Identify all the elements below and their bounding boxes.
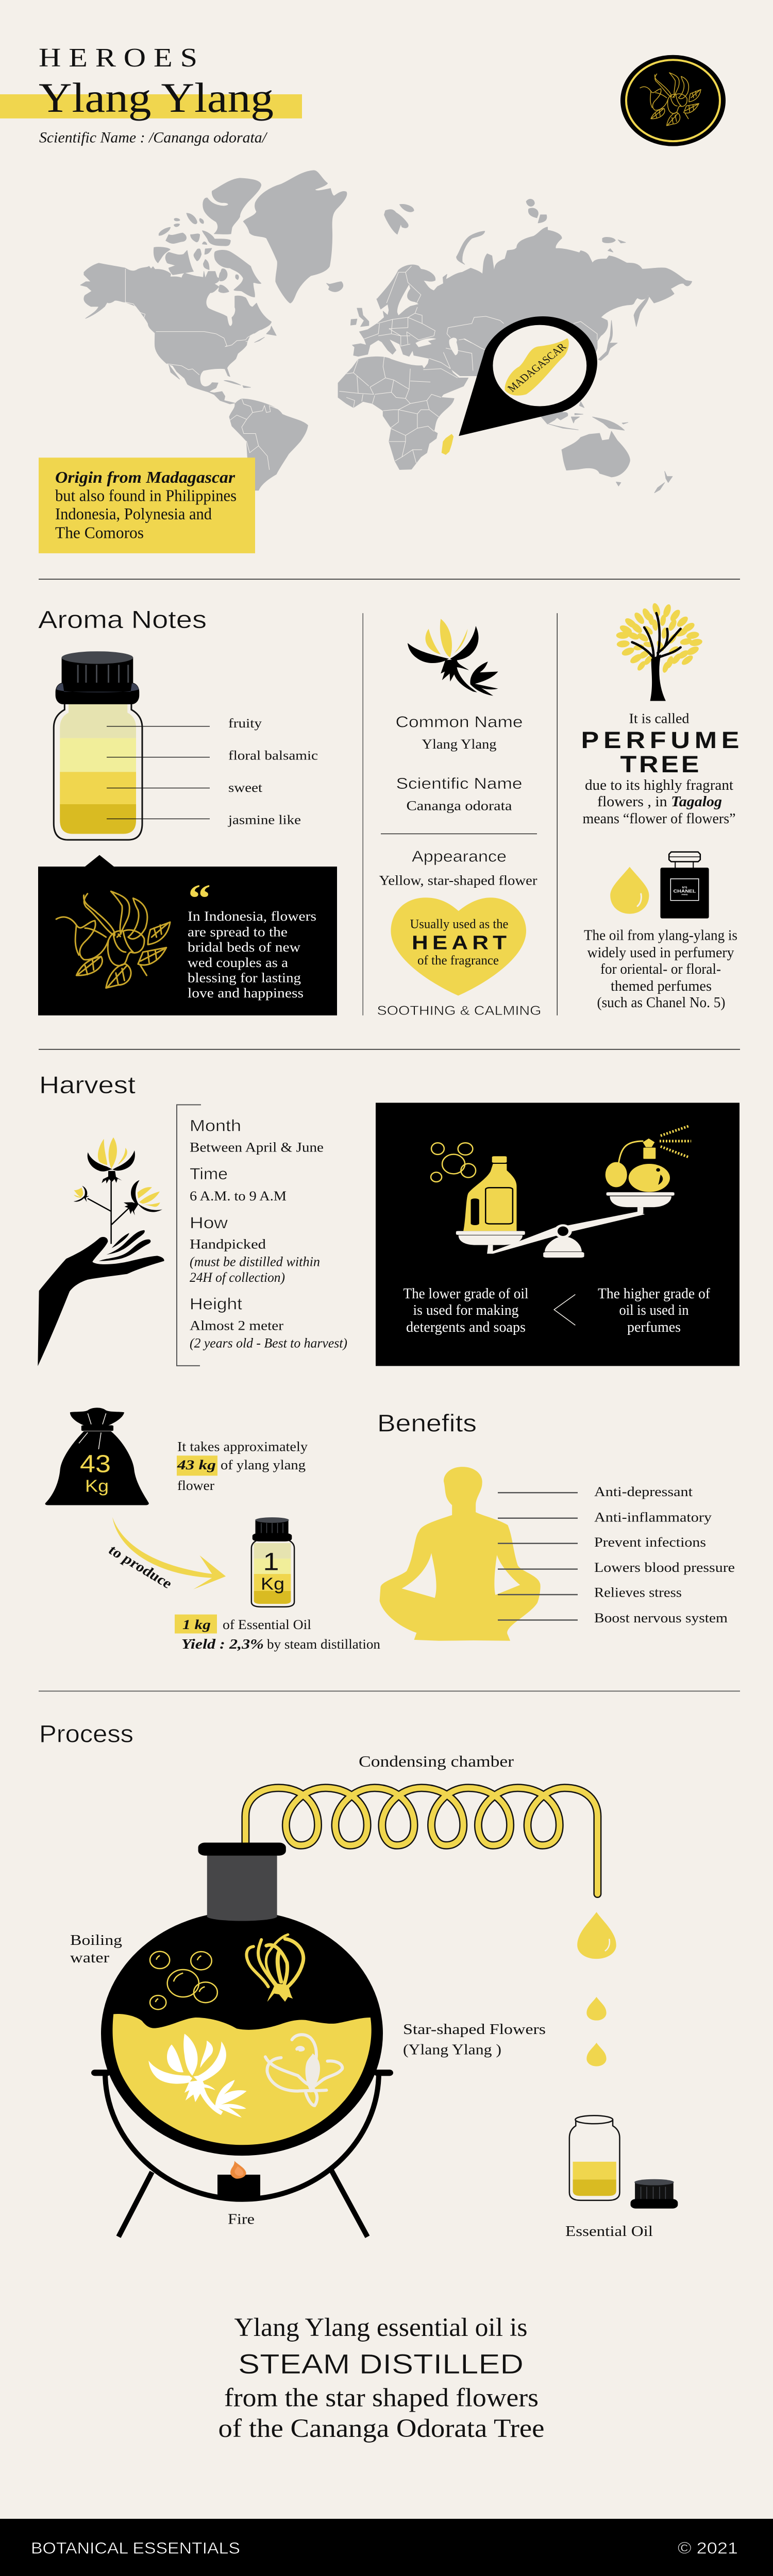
- subtitle: scientific name: Scientific Name : /Cananga odorata/: [39, 129, 268, 146]
- text: 43 kg of flower: 43 kg: [177, 1458, 216, 1473]
- panel: oil grades: is used for making: [413, 1301, 519, 1318]
- callout: origin: The Comoros: [55, 524, 144, 542]
- heading: Aroma Notes: Aroma Notes: [38, 606, 207, 634]
- panel: Indonesia quote: wed couples as a: [188, 956, 289, 971]
- panel: Indonesia quote: love and happiness: [188, 986, 304, 1001]
- text: 43 kg of flower: [177, 1439, 308, 1494]
- harvest facts: [177, 1105, 347, 1366]
- aroma note labels: floral balsamic: [228, 748, 318, 762]
- aroma note labels: fruity: [228, 716, 262, 731]
- benefit labels: [498, 1485, 735, 1625]
- harvest facts: How: [190, 1214, 228, 1232]
- icon: oil drop: [610, 867, 649, 914]
- arrow: to produce: to produce: [105, 1543, 176, 1591]
- label: fire: Fire: [228, 2210, 255, 2227]
- panel: Indonesia quote: [38, 855, 337, 1015]
- icon: perfume bottle: CHANEL: [673, 889, 696, 893]
- footer: © 2021: [678, 2540, 738, 2557]
- map pin: [459, 316, 597, 436]
- names block: Cananga odorata: [407, 799, 512, 814]
- label: condensing chamber: Condensing chamber: [359, 1753, 514, 1770]
- names block: Common Name: [396, 713, 523, 731]
- names block: Yellow, star-shaped flower: [379, 873, 537, 888]
- perfumery text: The oil from ylang-ylang is: [584, 926, 737, 943]
- panel: Indonesia quote: In Indonesia, flowers: [188, 909, 316, 924]
- footer: BOTANICAL ESSENTIALS: [31, 2540, 240, 2557]
- heading: Process: Process: [39, 1720, 133, 1748]
- perfume tree text: flowers , in Tagalog: [597, 793, 722, 809]
- eyebrow: HEROES: HEROES: [39, 43, 197, 73]
- label: boiling water: water: [70, 1949, 110, 1965]
- aroma note labels: jasmine like: [228, 812, 301, 827]
- world map: [80, 171, 692, 493]
- benefit labels: Anti-inflammatory: [594, 1510, 712, 1525]
- inland seas: [397, 284, 458, 355]
- text: 43 kg of flower: It takes approximately: [177, 1439, 308, 1454]
- icon: distillation stand: [91, 2070, 393, 2237]
- icon: round flower badge: [620, 55, 726, 146]
- closing statement: Ylang Ylang essential oil is: [234, 2313, 528, 2342]
- white flower: [148, 2033, 247, 2117]
- pin label: Madagascar: MADAGASCAR: [505, 341, 569, 394]
- label: star-shaped flowers: [403, 2021, 546, 2058]
- perfume tree text: TREE: [620, 752, 699, 777]
- perfumery text: widely used in perfumery: [587, 944, 734, 961]
- aroma note labels: sweet: [228, 781, 262, 795]
- icon: 1 kg bottle: 1: [263, 1548, 279, 1575]
- heading: Benefits: Benefits: [377, 1410, 477, 1437]
- icon: 1 kg bottle: Kg: [261, 1574, 284, 1594]
- names block: Scientific Name: [396, 774, 523, 792]
- closing statement: [219, 2313, 544, 2443]
- names block: Appearance: [412, 848, 507, 865]
- title highlight bar: [0, 94, 302, 118]
- harvest facts: Handpicked: [190, 1236, 266, 1252]
- perfumery text: for oriental- or floral-: [600, 960, 721, 977]
- callout: origin: Origin from Madagascar: [55, 469, 236, 486]
- names block: Ylang Ylang: [422, 737, 497, 752]
- flask neck: [198, 1842, 286, 1921]
- icon: distillation flask: [101, 1842, 383, 2156]
- icon: condensing coil: [245, 1788, 597, 1894]
- perfume tree text: means “flower of flowers”: [582, 810, 735, 826]
- panel: oil grades: detergents and soaps: [406, 1318, 526, 1335]
- harvest facts: Almost 2 meter: [190, 1318, 283, 1333]
- title: Ylang Ylang: Ylang Ylang: [39, 75, 274, 121]
- icon: meditating figure: [380, 1467, 541, 1641]
- perfume tree text: It is called: [629, 710, 690, 726]
- heart callout: [391, 897, 526, 996]
- panel: oil grades: [376, 1103, 740, 1366]
- names block: [379, 713, 537, 888]
- icon: yellow and black flower: [408, 619, 498, 696]
- harvest facts: 6 A.M. to 9 A.M: [190, 1189, 287, 1204]
- heart callout: Usually used as the: [410, 917, 509, 931]
- callout: origin: Indonesia, Polynesia and: [55, 505, 212, 523]
- text: 43 kg of flower: flower: [177, 1479, 215, 1494]
- label: boiling water: [70, 1931, 122, 1965]
- cream line flower: [265, 2035, 342, 2106]
- footer: [0, 2519, 773, 2576]
- yellow flower: [246, 1935, 304, 2002]
- highlight: Madagascar: [442, 434, 453, 455]
- closing statement: from the star shaped flowers: [224, 2383, 539, 2412]
- heart callout: of the fragrance: [417, 953, 499, 968]
- callout: origin: but also found in Philippines: [55, 487, 237, 505]
- harvest facts: Between April & June: [190, 1140, 324, 1155]
- flask body: [101, 1911, 383, 2156]
- icon: 43 kg sack: Kg: [85, 1477, 109, 1496]
- panel: oil grades: The higher grade of: [598, 1285, 711, 1301]
- closing statement: of the Cananga Odorata Tree: [219, 2414, 545, 2443]
- panel: Indonesia quote: blessing for lasting: [188, 971, 301, 986]
- aroma note labels: [107, 716, 318, 827]
- panel: oil grades: perfumes: [627, 1318, 681, 1335]
- text: 1 kg of essential oil: by steam distillation: [267, 1637, 380, 1652]
- closing statement: STEAM DISTILLED: [238, 2349, 524, 2380]
- panel: Indonesia quote: bridal beds of new: [188, 940, 301, 955]
- harvest facts: Month: [190, 1117, 241, 1135]
- harvest facts: (2 years old - Best to harvest): [190, 1336, 347, 1351]
- icon: perfume bottle: [660, 852, 709, 919]
- heart callout: HEART: [412, 931, 507, 954]
- oil liquid: [112, 2014, 372, 2145]
- icon: hand holding flower: [38, 1138, 164, 1366]
- callout: origin: [39, 457, 255, 553]
- text: 1 kg of essential oil: [175, 1615, 380, 1652]
- perfume tree text: PERFUME: [581, 727, 740, 753]
- panel: Indonesia quote: “: [188, 876, 211, 920]
- label: star-shaped flowers: Star-shaped Flowers: [403, 2021, 546, 2037]
- arrow: to produce: [105, 1517, 226, 1591]
- perfume tree text: due to its highly fragrant: [585, 776, 733, 793]
- icon: line-art flower: [56, 891, 170, 988]
- icon: essential oil jar: [569, 2115, 678, 2209]
- icon: 1 kg bottle: [251, 1517, 294, 1607]
- icon: fire burner: [217, 2161, 260, 2197]
- panel: oil grades: The lower grade of oil: [404, 1285, 529, 1301]
- americas and greenland: [80, 171, 347, 490]
- text: 43 kg of flower: of ylang ylang: [221, 1458, 306, 1473]
- harvest facts: Time: [190, 1165, 228, 1183]
- label: boiling water: Boiling: [70, 1931, 122, 1948]
- header: [0, 43, 302, 146]
- icon: perfume bottle: N°5: [682, 887, 687, 889]
- perfumery text: (such as Chanel No. 5): [597, 994, 726, 1011]
- benefit labels: Boost nervous system: [594, 1611, 728, 1625]
- perfumery text: [584, 926, 737, 1011]
- label: essential oil: Essential Oil: [565, 2223, 653, 2239]
- bubbles: [150, 1952, 217, 2009]
- icon: 43 kg sack: 43: [80, 1450, 111, 1478]
- icon: perfume bottle: PARIS: [682, 894, 688, 895]
- icon: falling drops: [577, 1912, 616, 2066]
- benefit labels: Lowers blood pressure: [594, 1561, 735, 1575]
- eurasia, africa and oceania: [338, 199, 692, 493]
- perfumery text: themed perfumes: [611, 977, 712, 994]
- caption: soothing and calming: SOOTHING & CALMING: [377, 1003, 542, 1018]
- benefit labels: Anti-depressant: [594, 1485, 693, 1500]
- panel: Indonesia quote: are spread to the: [188, 925, 288, 940]
- text: 1 kg of essential oil: Yield : 2,3%: [181, 1636, 264, 1652]
- panel: oil grades: oil is used in: [619, 1301, 689, 1318]
- heading: Harvest: Harvest: [39, 1071, 136, 1098]
- harvest facts: (must be distilled within: [190, 1255, 320, 1269]
- label: star-shaped flowers: (Ylang Ylang ): [403, 2041, 501, 2058]
- icon: aroma bottle: [54, 651, 142, 840]
- icon: 43 kg sack: [45, 1408, 149, 1505]
- text: 1 kg of essential oil: of Essential Oil: [223, 1618, 311, 1632]
- perfume tree text: [581, 710, 740, 826]
- icon: balance scale: [431, 1126, 691, 1325]
- harvest facts: Height: [190, 1296, 243, 1313]
- benefit labels: Relieves stress: [594, 1585, 682, 1600]
- harvest facts: 24H of collection): [190, 1270, 285, 1285]
- benefit labels: Prevent infections: [594, 1535, 706, 1550]
- text: 1 kg of essential oil: 1 kg: [182, 1618, 211, 1632]
- icon: perfume tree: [616, 602, 703, 701]
